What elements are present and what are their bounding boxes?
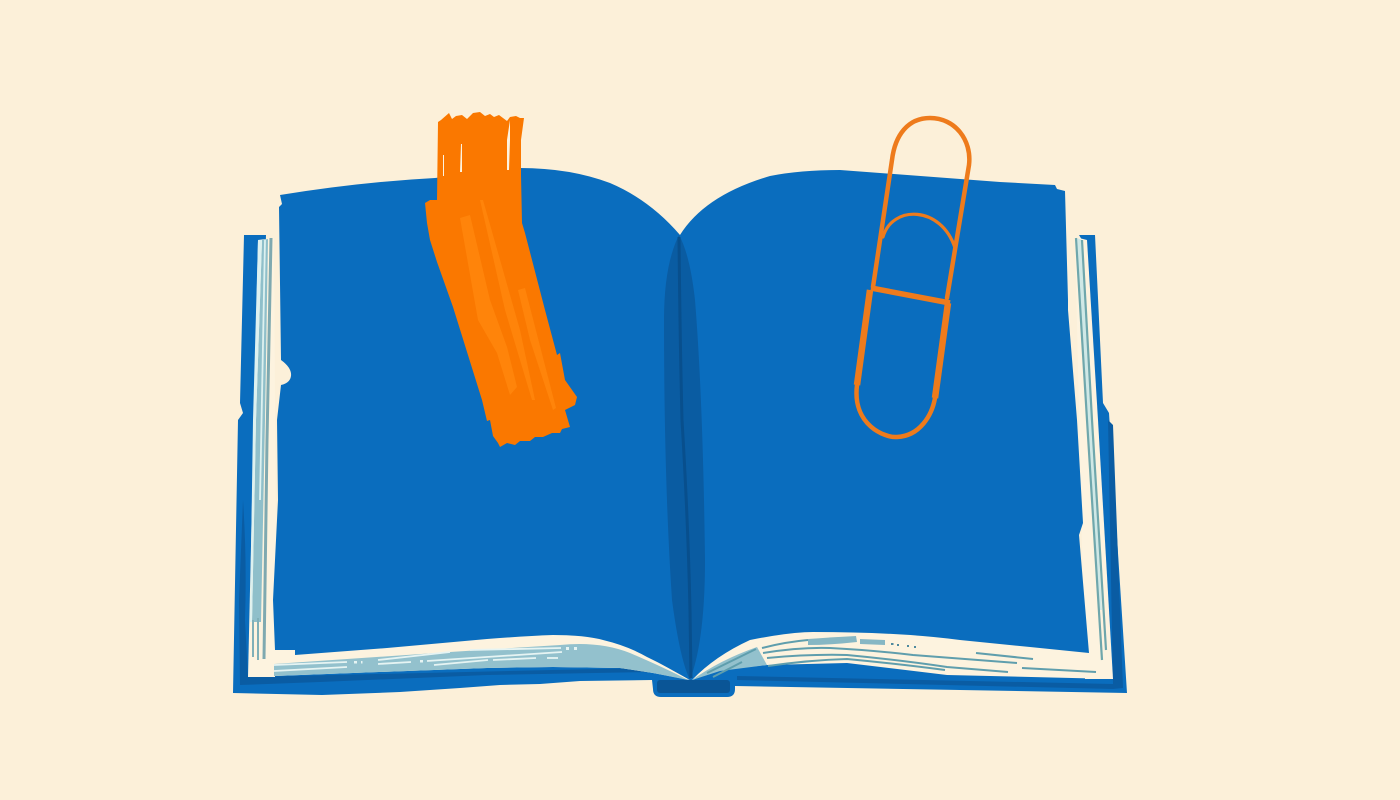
right paper stack: [1075, 237, 1113, 679]
orange brush stroke: [425, 112, 577, 447]
brush highlights: [460, 200, 556, 410]
left paper stack: [248, 238, 276, 677]
left page bottom edge: [274, 630, 690, 680]
right page: [670, 170, 1089, 680]
left page: [273, 168, 700, 680]
paperclip: [856, 118, 969, 437]
right page bottom edge: [692, 625, 1113, 680]
book cover: [233, 235, 1127, 697]
book spine gutter: [664, 235, 705, 680]
brush bristle gaps: [443, 120, 510, 176]
